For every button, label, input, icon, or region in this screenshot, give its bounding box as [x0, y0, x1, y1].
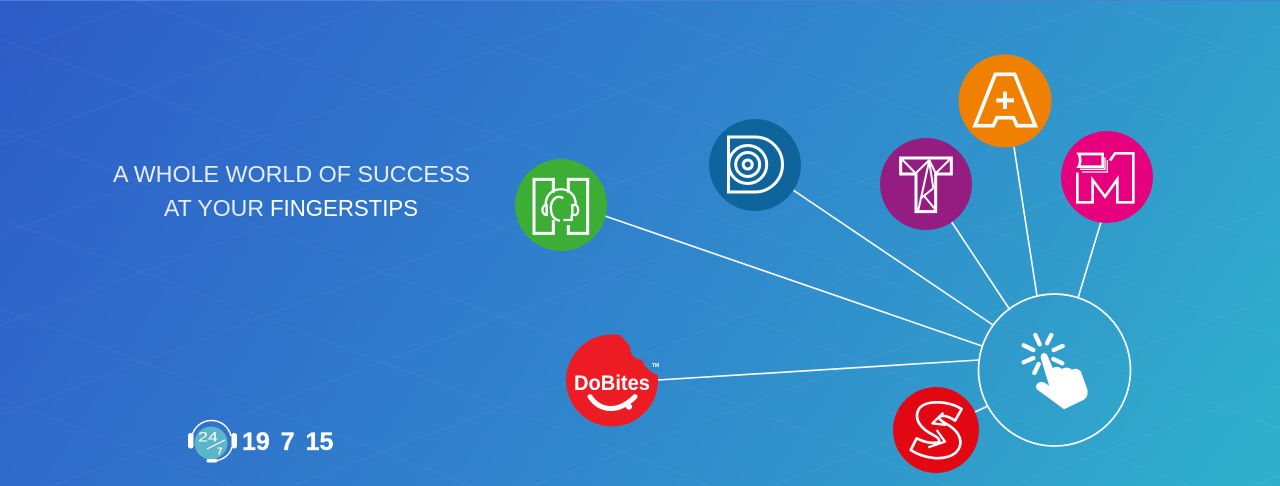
brand circle: T faceted: [880, 138, 972, 230]
heading: a whole world of success at your fingertips: A WHOLE WORLD OF SUCCESS: [113, 161, 470, 187]
icon: 24/7 headset: 7: [217, 446, 223, 458]
heading: a whole world of success at your fingertips: FINGERSTIPS: [270, 195, 418, 221]
icon: 24/7 headset: [188, 420, 237, 462]
phone number with 24/7 headset icon: [188, 420, 334, 462]
brand circle: DoBites logo: [566, 334, 659, 426]
icon: 24/7 headset: 24: [198, 428, 218, 444]
heading: a whole world of success at your fingertips: AT YOUR: [164, 195, 264, 221]
heading: a whole world of success at your fingertips: [113, 161, 470, 221]
phone number with 24/7 headset icon: 19 7 15: [242, 428, 334, 456]
connector lines from hub to brand circles: [605, 147, 1101, 412]
brand circle: H headset: [515, 159, 607, 251]
brand circle: D concentric: [709, 119, 801, 211]
hub circle with click icon: [978, 294, 1130, 446]
brand circle: DoBites logo: TM: [652, 363, 659, 369]
brand circle: A plus: [958, 54, 1052, 148]
brand circle: DoBites logo: DoBites: [574, 372, 650, 395]
brand circle: M ticket: [1061, 131, 1153, 223]
icon: pointing hand with click rays: [1024, 335, 1086, 408]
brand circle: S arrows: [893, 387, 979, 473]
